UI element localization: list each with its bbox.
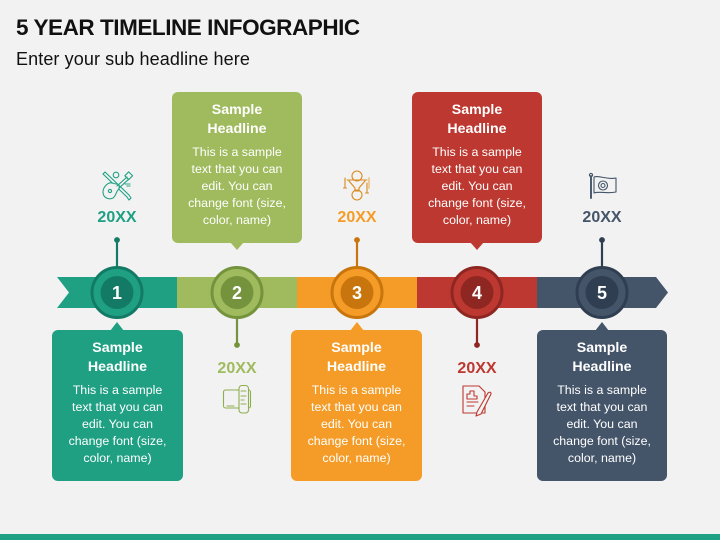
- icon: report and pencil: [463, 386, 491, 416]
- panel: callout 5: This is a sample: [557, 383, 647, 397]
- panel: callout 4: color, name): [443, 213, 511, 227]
- panel: callout 3: text that you can: [311, 400, 402, 414]
- callout pointer 4: [470, 242, 484, 250]
- node 2: 2: [232, 283, 242, 303]
- year label 2: 20XX: [217, 360, 257, 377]
- icon: guitar and tools: [103, 172, 133, 200]
- ribbon: [57, 277, 668, 308]
- panel: callout 1: color, name): [83, 451, 152, 465]
- panel: callout 4: text that you can: [432, 162, 522, 176]
- stem 3: [354, 237, 360, 268]
- panel: callout 2: color, name): [203, 213, 271, 227]
- callout pointer 2: [230, 242, 244, 250]
- panel: callout 2: text that you can: [192, 162, 282, 176]
- panel: callout 2: change font (size,: [188, 196, 286, 210]
- icon: money funnel: [344, 171, 369, 200]
- panel: callout 5: [537, 330, 667, 481]
- panel: callout 1: [52, 330, 183, 481]
- panel: callout 4: edit. You can: [442, 179, 512, 193]
- panel: callout 1: This is a sample: [73, 383, 162, 397]
- subtitle: Enter your sub headline here: [16, 49, 250, 69]
- panel: callout 5: Headline: [572, 359, 632, 375]
- panel: callout 2: Headline: [207, 121, 267, 137]
- node 1: 1: [112, 283, 122, 303]
- stem 4: [474, 316, 480, 348]
- panel: callout 2: This is a sample: [192, 145, 282, 159]
- year label 4: 20XX: [457, 360, 497, 377]
- panel: callout 5: edit. You can: [567, 417, 637, 431]
- panel: callout 2: [172, 92, 302, 243]
- stem 2: [234, 316, 240, 348]
- callout pointer 3: [350, 322, 364, 331]
- stem 1: [114, 237, 120, 268]
- panel: callout 1: edit. You can: [82, 417, 153, 431]
- panel: callout 4: This is a sample: [432, 145, 522, 159]
- panel: callout 5: Sample: [577, 340, 627, 356]
- bottom bar: [0, 534, 720, 540]
- callout pointer 5: [595, 322, 609, 331]
- panel: callout 1: text that you can: [72, 400, 163, 414]
- panel: callout 4: change font (size,: [428, 196, 526, 210]
- node 1: [92, 268, 142, 318]
- node 3: [332, 268, 382, 318]
- panel: callout 5: change font (size,: [553, 434, 651, 448]
- stem 5: [599, 237, 605, 268]
- node 2: [212, 268, 262, 318]
- icon: device: [224, 386, 250, 413]
- panel: callout 3: [291, 330, 422, 481]
- title: 5 YEAR TIMELINE INFOGRAPHIC: [16, 15, 360, 40]
- icon: flag: [589, 173, 616, 198]
- node 3: 3: [352, 283, 362, 303]
- panel: callout 5: color, name): [568, 451, 636, 465]
- year label 5: 20XX: [582, 209, 622, 226]
- panel: callout 4: [412, 92, 542, 243]
- node 5: 5: [597, 283, 607, 303]
- panel: callout 3: change font (size,: [308, 434, 405, 448]
- panel: callout 5: text that you can: [557, 400, 647, 414]
- panel: callout 3: Headline: [327, 359, 386, 375]
- callout pointer 1: [110, 322, 124, 331]
- node 4: 4: [472, 283, 482, 303]
- node 4: [452, 268, 502, 318]
- panel: callout 3: This is a sample: [312, 383, 401, 397]
- panel: callout 3: edit. You can: [321, 417, 392, 431]
- panel: callout 2: edit. You can: [202, 179, 272, 193]
- year label 3: 20XX: [337, 209, 377, 226]
- panel: callout 1: change font (size,: [69, 434, 166, 448]
- year label 1: 20XX: [97, 209, 137, 226]
- panel: callout 1: Headline: [88, 359, 147, 375]
- panel: callout 3: Sample: [331, 340, 382, 356]
- panel: callout 2: Sample: [212, 102, 262, 118]
- node 5: [577, 268, 627, 318]
- panel: callout 3: color, name): [322, 451, 391, 465]
- panel: callout 1: Sample: [92, 340, 143, 356]
- panel: callout 4: Sample: [452, 102, 502, 118]
- panel: callout 4: Headline: [447, 121, 507, 137]
